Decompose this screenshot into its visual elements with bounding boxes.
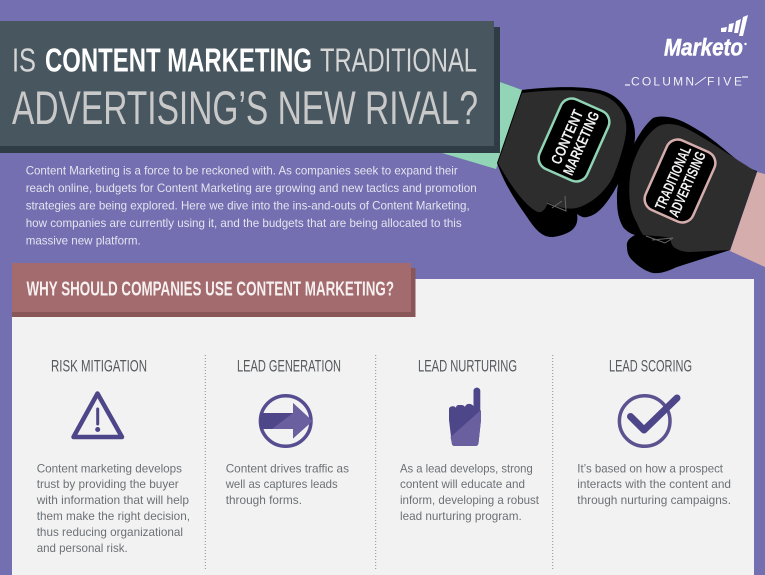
left glove (497, 87, 635, 237)
column: lead scoring: interacts with the content and (577, 477, 731, 491)
column: risk mitigation: them make the right decision, (37, 509, 190, 523)
logo: Marketo (664, 15, 748, 62)
icon: arrow in circle (260, 396, 312, 446)
label: content marketing (535, 95, 613, 185)
panel: why use content marketing (12, 263, 754, 575)
pink wrist (730, 172, 765, 267)
column: risk mitigation: thus reducing organizational (37, 525, 183, 539)
green wrist (442, 82, 522, 169)
column: risk mitigation: trust by providing the buyer (37, 477, 179, 491)
intro text: massive new platform. (26, 233, 141, 247)
label: traditional advertising (641, 136, 719, 226)
title line 2: ADVERTISING’S NEW RIVAL? (12, 81, 478, 134)
icon: pointing hand (449, 388, 481, 446)
column: lead nurturing: LEAD NURTURING (418, 356, 517, 376)
title line 1: IS (12, 42, 36, 78)
column: risk mitigation: and personal risk. (37, 541, 128, 555)
logo: Marketo: Marketo (664, 34, 743, 62)
title panel (0, 21, 500, 153)
column: lead scoring: LEAD SCORING (609, 356, 692, 376)
column: lead scoring: It’s based on how a prospect (577, 461, 724, 475)
right glove (617, 116, 757, 273)
column: lead generation: well as captures leads (225, 477, 338, 491)
column: lead scoring (577, 356, 731, 507)
title line 1: TRADITIONAL (320, 42, 477, 78)
intro text (26, 164, 477, 247)
column: risk mitigation: Content marketing develops (37, 461, 182, 475)
column: lead nurturing (400, 356, 540, 523)
logo: Column Five: COLUMN (631, 74, 694, 88)
logo: Column Five (625, 74, 748, 88)
column: risk mitigation: with information that will help (36, 493, 189, 507)
label: traditional advertising: TRADITIONAL (652, 144, 695, 213)
column: lead generation (225, 356, 349, 507)
label: content marketing: CONTENT (548, 107, 587, 167)
column: lead generation: through forms. (226, 493, 302, 507)
icon: warning triangle (74, 394, 122, 437)
icon: check mark in circle (619, 396, 677, 446)
column: lead nurturing: inform, developing a robust (400, 493, 540, 507)
label: content marketing: MARKETING (560, 109, 603, 178)
column: lead nurturing: lead nurturing program. (400, 509, 522, 523)
intro text: Content Marketing is a force to be reckoned with. As companies seek to expand their (26, 164, 458, 178)
title line 1: CONTENT MARKETING (45, 42, 312, 78)
intro text: strategies are being explored. Here we dive into the ins-and-outs of Content Marketing, (26, 199, 470, 213)
heading banner (12, 263, 416, 317)
column: risk mitigation: RISK MITIGATION (51, 356, 147, 376)
illustration: boxing gloves (442, 82, 765, 273)
intro text: reach online, budgets for Content Marketing are growing and new tactics and promotion (26, 181, 477, 195)
column: risk mitigation (36, 356, 190, 555)
label: traditional advertising: ADVERTISING (666, 149, 710, 220)
column: lead scoring: through nurturing campaigns. (577, 493, 731, 507)
intro text: how companies are currently using it, and the budgets that are being allocated to this (26, 216, 462, 230)
column: lead generation: LEAD GENERATION (237, 356, 341, 376)
column: lead generation: Content drives traffic as (226, 461, 349, 475)
logo: Column Five: FIVE (707, 74, 742, 88)
column: lead nurturing: As a lead develops, strong (400, 461, 533, 475)
heading banner: WHY SHOULD COMPANIES USE CONTENT MARKETING? (26, 279, 394, 301)
column: lead nurturing: content will educate and (400, 477, 525, 491)
